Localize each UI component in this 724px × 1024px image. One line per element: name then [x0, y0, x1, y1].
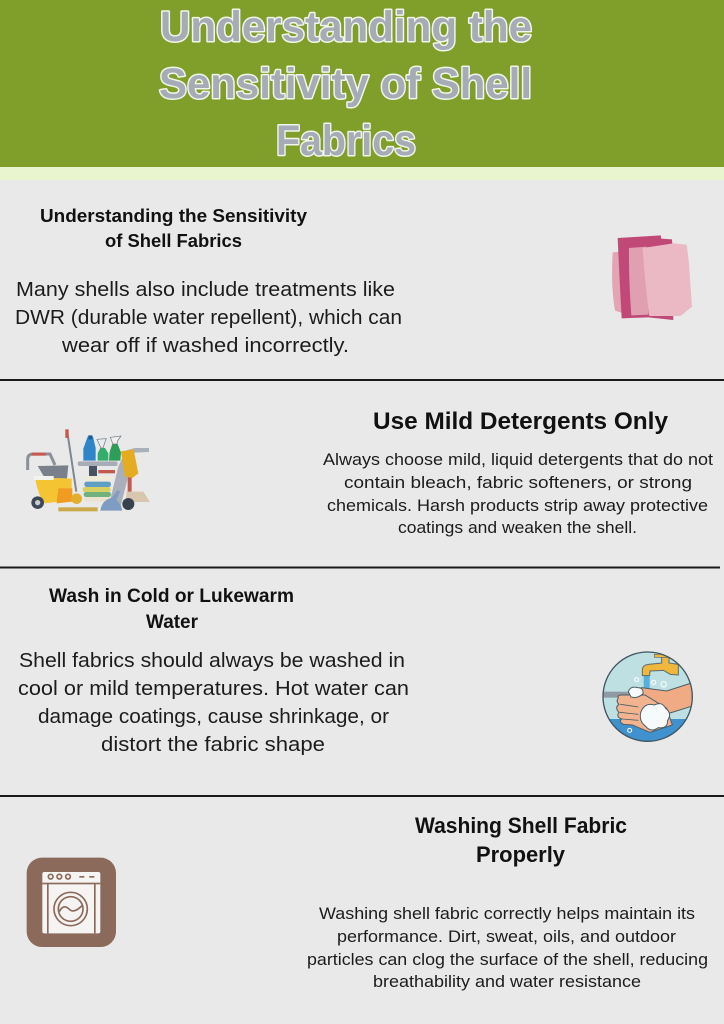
heading: [40, 206, 307, 251]
text block: [323, 450, 713, 537]
bottles: [83, 437, 96, 461]
icon: fabric swatches: [612, 235, 692, 320]
text block: [307, 905, 708, 991]
cart frame: [108, 448, 149, 507]
soap foam: [640, 704, 670, 730]
right arm: [640, 683, 692, 714]
heading: Washing Shell Fabric: [415, 813, 627, 838]
mop stick: [67, 430, 76, 492]
text block: coatings and weaken the shell.: [398, 518, 637, 537]
broom: [128, 470, 132, 493]
text block: Shell fabrics should always be washed in: [19, 650, 405, 672]
text block: wear off if washed incorrectly.: [61, 335, 349, 357]
panel: washing properly: [27, 813, 708, 991]
title: Understanding the: [160, 3, 532, 51]
text block: distort the fabric shape: [101, 734, 325, 756]
icon: hand washing: [602, 652, 695, 742]
text block: [15, 279, 402, 357]
text block: breathability and water resistance: [373, 973, 641, 991]
text block: cool or mild temperatures. Hot water can: [18, 678, 409, 700]
left hand with fingers: [617, 695, 672, 732]
title: Fabrics: [276, 117, 416, 165]
text block: Many shells also include treatments like: [16, 279, 395, 301]
text block: Always choose mild, liquid detergents that do not: [323, 450, 713, 469]
title banner: [0, 0, 724, 180]
heading: of Shell Fabrics: [105, 231, 242, 251]
icon: washing machine: [27, 858, 116, 947]
icon: cleaning supplies: [28, 429, 150, 511]
heading: Properly: [476, 842, 566, 867]
text block: performance. Dirt, sweat, oils, and outdoor: [337, 928, 677, 946]
text block: particles can clog the surface of the shell, reducing: [307, 951, 708, 969]
heading: Water: [146, 612, 199, 633]
heading: [49, 586, 294, 633]
wringer and bucket: [38, 465, 68, 478]
heading: Understanding the Sensitivity: [40, 206, 307, 226]
gloves: [121, 449, 138, 478]
text block: Washing shell fabric correctly helps maintain its: [319, 905, 695, 923]
text block: damage coatings, cause shrinkage, or: [38, 706, 389, 728]
panel: mild detergents: [0, 408, 720, 568]
dustpan: [100, 490, 122, 511]
shelf: [78, 461, 118, 466]
title: Sensitivity of Shell: [159, 60, 532, 108]
text block: [18, 650, 409, 756]
cart handle: [28, 454, 55, 470]
text block: contain bleach, fabric softeners, or strong: [344, 473, 692, 492]
towels stack: [86, 476, 111, 482]
title: [159, 3, 532, 165]
heading: Use Mild Detergents Only: [373, 408, 669, 435]
panel: water temperature: [0, 586, 724, 797]
heading: Wash in Cold or Lukewarm: [49, 586, 294, 607]
heading: [415, 813, 627, 867]
text block: DWR (durable water repellent), which can: [15, 307, 402, 329]
text block: chemicals. Harsh products strip away protective: [327, 496, 708, 515]
panel: fabric sensitivity: [0, 206, 724, 381]
faucet: [642, 657, 678, 676]
